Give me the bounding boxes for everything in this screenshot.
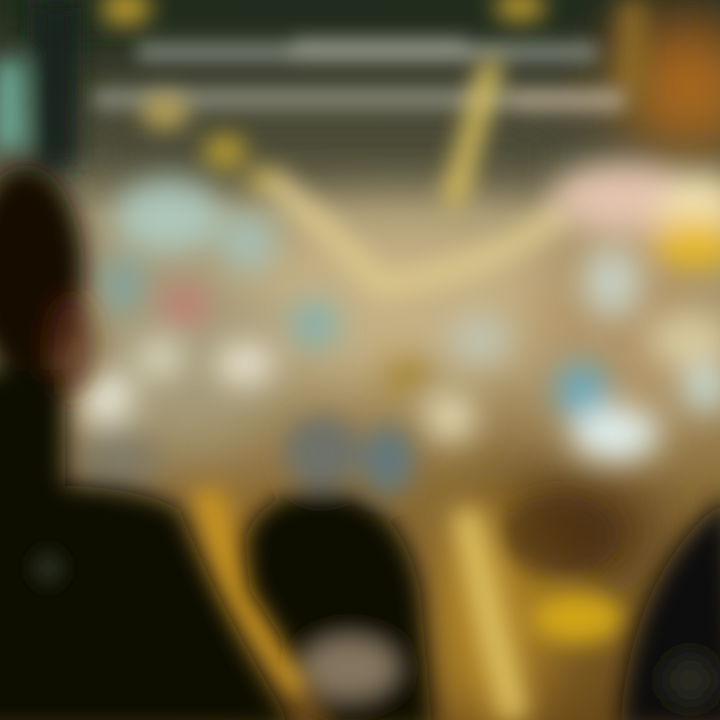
glowing shop signs, right: [551, 164, 720, 461]
silhouette: person centre, grey head and dark body: [245, 416, 432, 720]
glowing shop signs, left and centre: [71, 178, 512, 496]
phone glint on left silhouette: [32, 550, 64, 586]
silhouette: person left foreground: [0, 165, 295, 720]
silhouette: person right foreground: [620, 495, 720, 720]
string lights: [100, 0, 560, 285]
road markings, yellow: [205, 490, 624, 720]
top edge dark wall and left strip: [0, 0, 646, 170]
headline: illegible blurred two-line title: [92, 38, 627, 112]
